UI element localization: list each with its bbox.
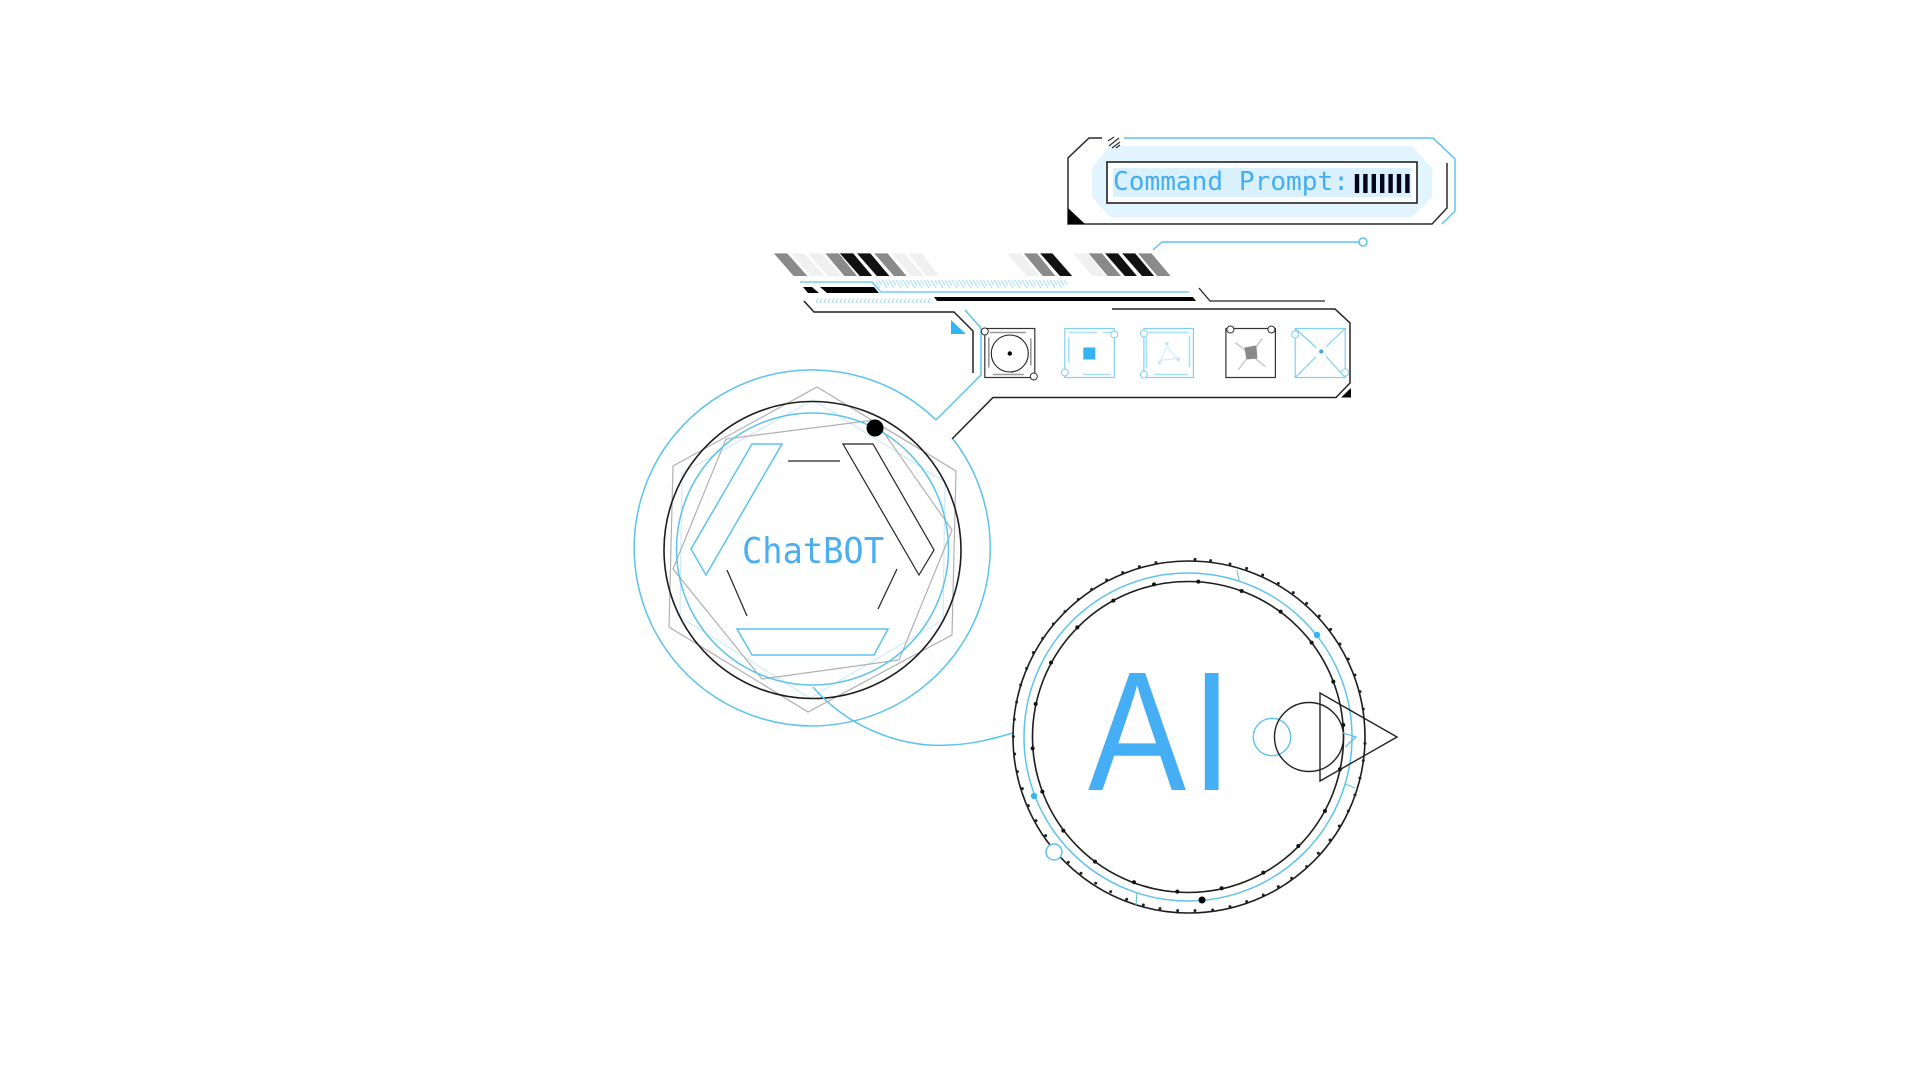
panel: tool icons frame (804, 301, 1351, 439)
AI emblem (1012, 558, 1397, 913)
corner triangle (1341, 388, 1351, 398)
connector curve (813, 687, 1013, 745)
blue ring (1024, 573, 1352, 901)
black right bracket (1199, 288, 1325, 301)
connector wire with node (1153, 238, 1367, 250)
chatbot emblem (634, 370, 990, 726)
hollow node (1046, 844, 1062, 860)
outer blue ring (634, 370, 990, 726)
blue triangle (951, 320, 966, 334)
chatbot label: ChatBOT (742, 531, 884, 572)
black node dot (1198, 896, 1206, 904)
small blue triangle (1343, 733, 1356, 747)
panel glow background (1092, 146, 1432, 217)
icon: blue square (1061, 328, 1118, 378)
command frame black outline (1068, 138, 1447, 224)
corner triangle (1068, 208, 1085, 224)
AI label: AI (1088, 636, 1232, 826)
icon: triangle (1140, 328, 1193, 378)
blue hatch strip (876, 280, 1067, 288)
outer tick dots (1012, 558, 1366, 912)
black segments (803, 287, 879, 293)
prompt box (1107, 162, 1417, 203)
cursor bars (1357, 174, 1407, 193)
icon: gray cross (1226, 326, 1275, 378)
icon: dial (981, 328, 1037, 380)
fine hatch strip (815, 299, 931, 303)
black frame outline (952, 309, 1350, 439)
blue stepped line (800, 282, 1189, 292)
striped bar (774, 253, 1171, 276)
command frame blue outline (1124, 138, 1455, 224)
icon: blue cross (1292, 328, 1349, 378)
black triangle (1320, 693, 1397, 781)
inner black ring (1032, 582, 1344, 892)
teal ticks (1136, 570, 1355, 905)
data bars (800, 280, 1325, 303)
rotated gray hexagon (673, 420, 952, 679)
black thick bar (934, 297, 1196, 301)
pale blue hexagon (680, 400, 945, 698)
orbit dot (866, 420, 884, 436)
black ring (664, 402, 961, 698)
gray hexagon (669, 387, 956, 712)
left black bracket (804, 301, 973, 373)
outer black ring (1013, 561, 1365, 913)
blue node dots (1031, 632, 1320, 799)
black accent lines (727, 461, 897, 616)
text highlight (1113, 168, 1411, 197)
inner blue ring (676, 413, 948, 685)
left blue segment (691, 444, 782, 575)
inner ring dots (1031, 580, 1345, 894)
right black segment (843, 444, 934, 575)
small blue circle (1253, 718, 1291, 756)
hatch mark (1108, 137, 1120, 148)
bottom blue segment (737, 629, 888, 655)
command prompt label: Command Prompt: (1113, 167, 1349, 197)
panel: command prompt (1068, 137, 1455, 224)
blue connector line (936, 310, 981, 420)
black circle (1274, 702, 1344, 772)
